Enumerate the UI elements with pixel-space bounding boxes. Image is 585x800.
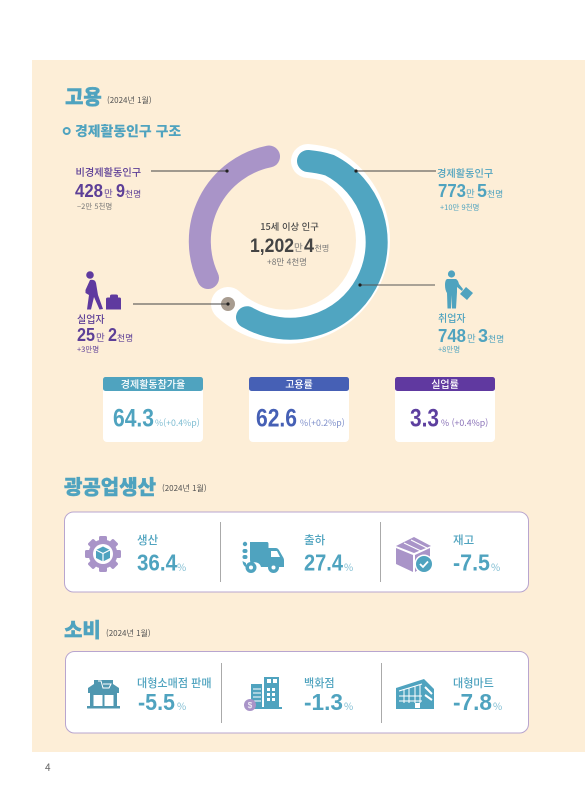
label: 경제활동인구: 천명: [487, 187, 503, 200]
stat: 대형소매점 판매: 대형소매점 판매: [137, 675, 212, 691]
card: 실업률: 3.3: [410, 404, 439, 432]
stat: 출하: [304, 532, 353, 576]
center label: 15세 이상 인구: 15세 이상 인구: [260, 219, 319, 233]
center label: 15세 이상 인구: +8만 4천명: [267, 256, 307, 268]
heading: 고용: (2024년 1월): [107, 95, 152, 106]
heading: 소비: (2024년 1월): [106, 628, 151, 639]
icon: office worker with briefcase: [445, 270, 473, 308]
heading: 고용: [65, 81, 152, 110]
stat: 대형마트: %: [493, 698, 502, 713]
card: 경제활동참가율: %(+0.4%p): [155, 416, 200, 429]
stat: 출하: 27.4: [304, 550, 343, 576]
center label: 15세 이상 인구: 4: [304, 236, 314, 257]
card: 실업률: 실업률: [431, 376, 459, 391]
stat: 재고: 재고: [453, 532, 475, 548]
label: 취업자: 748: [438, 326, 466, 346]
center label: 15세 이상 인구: 만: [294, 240, 303, 254]
stat: 생산: %: [177, 559, 186, 574]
heading: 소비: 소비: [64, 614, 101, 643]
center label: 15세 이상 인구: 천명: [314, 243, 329, 254]
label: 취업자: 3: [478, 326, 488, 346]
leader line: 비경제활동인구: [151, 169, 229, 173]
label: 경제활동인구: 만: [466, 186, 475, 200]
label: 취업자: 만: [467, 331, 476, 345]
leader line: 경제활동인구: [354, 169, 436, 173]
stat: 재고: [453, 532, 500, 576]
leader line: 취업자: [358, 283, 435, 287]
label: 실업자: 만: [96, 330, 105, 344]
stat: 재고: -7.5: [453, 550, 490, 576]
heading: 고용: 고용: [65, 81, 102, 110]
label: 실업자: 25: [77, 325, 95, 345]
subheading: 경제활동인구 구조: 경제활동인구 구조: [75, 121, 181, 141]
center label: 15세 이상 인구: [250, 219, 329, 268]
stat: 백화점: [304, 675, 353, 715]
label: 취업자: 천명: [488, 332, 504, 345]
label: 비경제활동인구: 만: [104, 186, 113, 200]
stat: 백화점: -1.3: [304, 689, 343, 715]
label: 경제활동인구: +10만 9천명: [440, 202, 479, 213]
label: 비경제활동인구: [75, 164, 141, 212]
stat: 재고: %: [491, 559, 500, 574]
stat: 대형마트: 대형마트: [453, 675, 494, 691]
card: 경제활동참가율: 64.3: [113, 404, 154, 432]
heading: 광공업생산: [64, 471, 207, 500]
icon: delivery truck: [242, 542, 284, 573]
stat: 생산: 36.4: [137, 550, 177, 576]
card: 경제활동참가율: 경제활동참가율: [121, 376, 185, 391]
label: 실업자: 실업자: [77, 311, 105, 326]
label: 실업자: 천명: [117, 331, 133, 344]
heading: 광공업생산: (2024년 1월): [162, 483, 207, 494]
stat: 대형소매점 판매: -5.5: [138, 689, 175, 715]
stat: 대형소매점 판매: [137, 675, 212, 715]
label: 비경제활동인구: 비경제활동인구: [76, 164, 141, 179]
panel: 광공업생산: [64, 512, 528, 592]
panel: 소비: [66, 652, 528, 733]
label: 취업자: [438, 310, 504, 355]
label: 취업자: +8만명: [438, 344, 460, 355]
label: 비경제활동인구: 천명: [125, 187, 141, 200]
card: 고용률: %(+0.2%p): [300, 416, 345, 429]
stat: 출하: 출하: [304, 532, 326, 548]
label: 경제활동인구: [437, 165, 503, 213]
stat: 생산: 생산: [137, 532, 159, 548]
leader line: 실업자: [133, 302, 230, 306]
label: 실업자: +3만명: [77, 344, 99, 355]
stat: 대형소매점 판매: %: [177, 698, 186, 713]
donut chart: [200, 156, 377, 329]
icon: shopping store: [87, 680, 120, 708]
icon: box with check: [396, 537, 434, 574]
icon: unemployed person with suitcase: [86, 271, 121, 310]
label: 경제활동인구: 773: [438, 181, 466, 201]
label: 경제활동인구: 5: [477, 181, 487, 201]
label: 비경제활동인구: 9: [116, 181, 125, 201]
stat: 백화점: 백화점: [304, 675, 335, 691]
card: 실업률: % (+0.4%p): [441, 416, 488, 429]
icon: gear with box: [85, 536, 121, 572]
stat: 백화점: %: [344, 698, 353, 713]
card: 고용률: 고용률: [285, 376, 313, 391]
heading: 광공업생산: 광공업생산: [64, 471, 156, 500]
page number: 4: [45, 759, 51, 774]
stat: 생산: [137, 532, 186, 576]
label: 비경제활동인구: −2만 5천명: [77, 201, 112, 212]
label: 경제활동인구: 경제활동인구: [437, 165, 493, 180]
icon: department store buildings: $: [248, 701, 253, 710]
label: 실업자: 2: [108, 325, 117, 345]
stat: 대형마트: -7.8: [453, 689, 492, 715]
heading: 소비: [64, 614, 151, 643]
card: 고용률: 62.6: [256, 404, 297, 432]
center label: 15세 이상 인구: 1,202: [250, 236, 294, 257]
icon: department store buildings: [244, 677, 282, 711]
label: 실업자: [77, 311, 133, 355]
icon: large mart building: [396, 679, 434, 709]
label: 비경제활동인구: 428: [75, 181, 103, 201]
card: 고용률: [249, 376, 349, 442]
label: 취업자: 취업자: [438, 310, 466, 325]
card: 경제활동참가율: [103, 376, 203, 442]
stat: 대형마트: [453, 675, 502, 715]
card: 실업률: [395, 376, 495, 442]
stat: 출하: %: [344, 559, 353, 574]
